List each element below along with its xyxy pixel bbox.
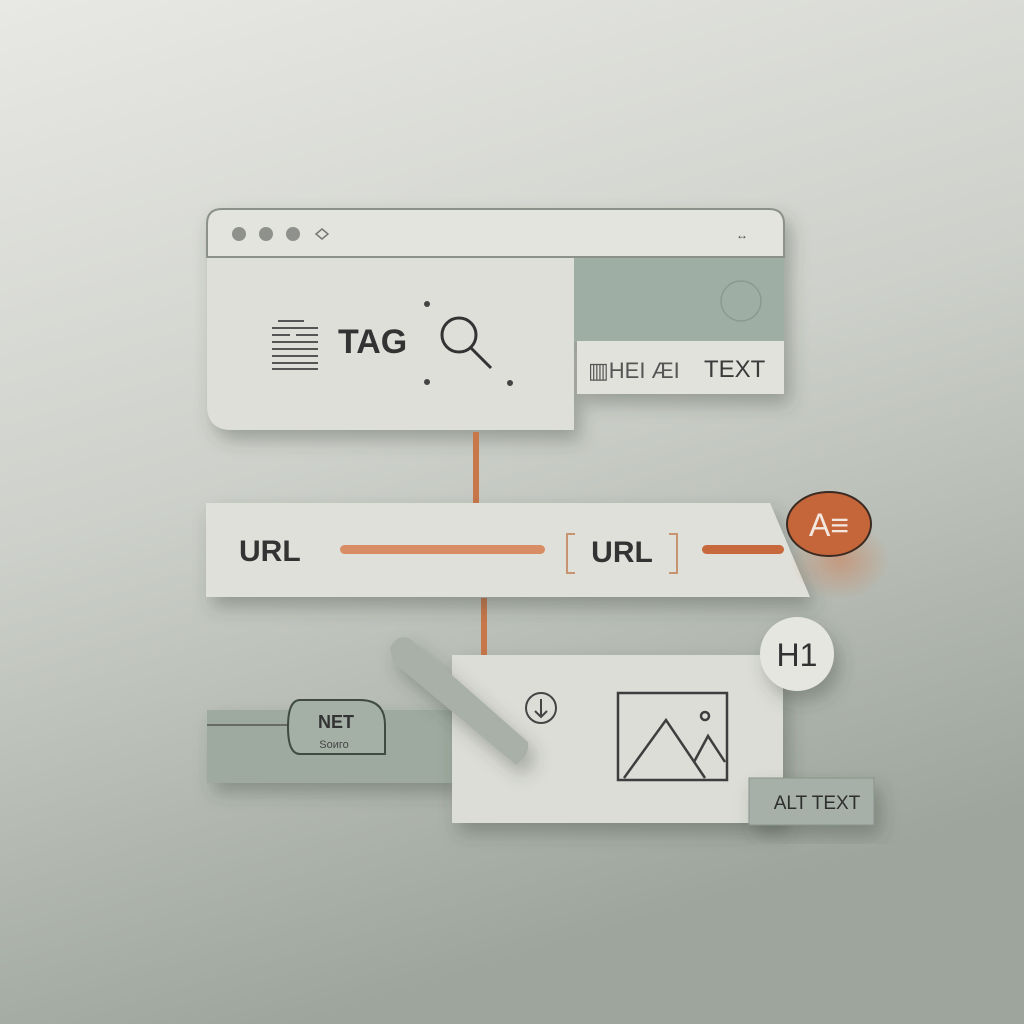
badge: NET: NET bbox=[318, 712, 354, 732]
heading: TAG: TAG bbox=[338, 323, 407, 361]
icon: arrows: ↔ bbox=[736, 228, 748, 242]
badge: H1: H1 bbox=[777, 637, 817, 673]
diagonal bar bbox=[390, 637, 528, 765]
bracket URL: URL bbox=[591, 536, 653, 569]
badge: H1 bbox=[760, 617, 834, 691]
icon: magnifier bbox=[424, 301, 513, 386]
alt text label bbox=[749, 778, 874, 825]
panel: sage bar with badge bbox=[207, 710, 457, 783]
badge: A: A≡ bbox=[809, 507, 849, 543]
panel: image card bbox=[452, 655, 783, 823]
badge: NET bbox=[288, 700, 385, 754]
connector middle bbox=[481, 598, 487, 656]
bracket URL bbox=[567, 534, 677, 573]
icon: text lines bbox=[272, 321, 318, 369]
orange line right bbox=[702, 545, 784, 554]
window dots bbox=[232, 227, 328, 241]
panel: URL bar bbox=[206, 503, 810, 597]
orange line bbox=[340, 545, 545, 554]
badge: NET: Ѕоиго bbox=[319, 739, 349, 751]
connector top bbox=[473, 432, 479, 504]
badge: A bbox=[787, 492, 890, 600]
sage panel bbox=[574, 258, 784, 342]
alt text label: ALT TEXT bbox=[774, 793, 861, 814]
URL label: URL bbox=[239, 535, 301, 568]
left tag panel bbox=[207, 258, 574, 430]
icon: image bbox=[618, 693, 727, 780]
browser top bar bbox=[207, 209, 784, 257]
text strip: ▥HEI ÆI bbox=[588, 358, 680, 383]
icon: download bbox=[526, 693, 556, 723]
text strip: TEXT bbox=[704, 356, 766, 383]
text strip bbox=[577, 341, 784, 394]
panel: browser window top bbox=[207, 209, 784, 430]
